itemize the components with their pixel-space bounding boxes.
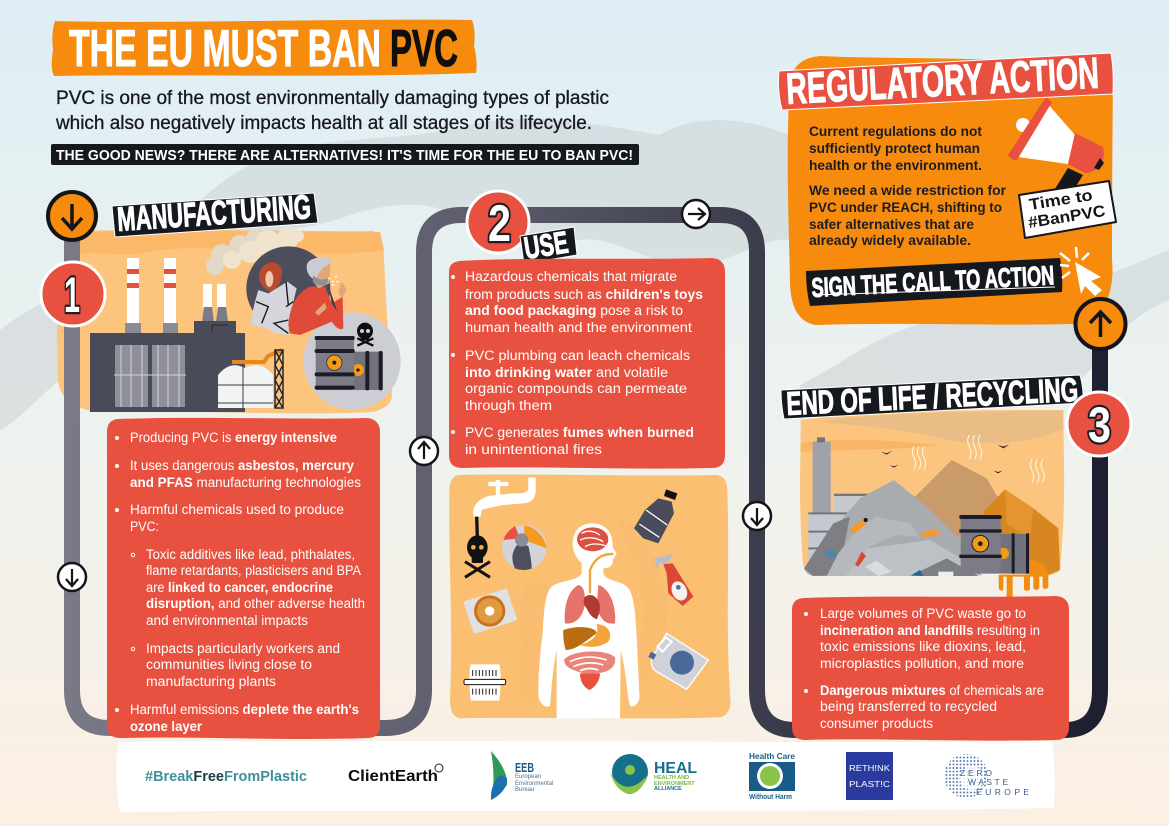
tube over illustration (64, 240, 80, 420)
intro text (55, 88, 609, 134)
title banner: PVC (390, 20, 458, 78)
logo: break free from plastic: #BreakFreeFromPlastic (145, 769, 307, 785)
logo: zero waste europe: W A S T E (968, 777, 1008, 787)
button: sign the call to action (806, 258, 1062, 306)
bullet list: manufacturing: and environmental impacts (146, 613, 308, 628)
bullet list: end of life: Large volumes of PVC waste go to (820, 606, 1026, 621)
bullet list: use (451, 269, 703, 457)
panel: end of life text (792, 596, 1069, 741)
bullet list: manufacturing: ozone layer (130, 719, 203, 734)
regulatory text: safer alternatives that are (809, 217, 974, 232)
logo: rethink plastic (846, 752, 893, 800)
panel: use text (449, 258, 725, 469)
logo: HEAL: ALLIANCE (654, 786, 682, 792)
bullet list: use: PVC generates fumes when burned (465, 425, 694, 440)
icon: food container (464, 664, 506, 701)
bullet list: manufacturing: Producing PVC is energy intensive (130, 430, 337, 445)
icon: smoke clouds (206, 227, 304, 275)
intro text: PVC is one of the most environmentally damaging types of plastic (56, 88, 609, 109)
title banner: THE EU MUST BAN (69, 20, 381, 78)
intro text: which also negatively impacts health at all stages of its lifecycle. (55, 113, 592, 134)
bullet list: manufacturing: and PFAS manufacturing technologies (130, 475, 361, 490)
icon: detergent container (648, 633, 708, 689)
logo: rethink plastic: RETH!NK (849, 764, 891, 773)
arrow: tube up middle (410, 437, 438, 465)
logo: zero waste europe (944, 754, 1029, 798)
footer logos strip (116, 741, 1055, 812)
regulatory text: sufficiently protect human (809, 141, 980, 156)
logo: rethink plastic: PLAST!C (849, 780, 890, 789)
bullet list: manufacturing: Impacts particularly workers and (146, 641, 340, 656)
icon: human body with organs (538, 523, 640, 718)
bullet list: use: organic compounds can permeate (465, 381, 687, 396)
number badge 3 (1067, 392, 1131, 456)
smoke background (0, 119, 1169, 430)
panel: use illustration (449, 475, 731, 718)
logo: clientearth: ClientEarth (348, 768, 438, 785)
bullet list: use: PVC plumbing can leach chemicals (465, 348, 690, 363)
bullet list: manufacturing: manufacturing plants (146, 674, 276, 689)
regulatory text: We need a wide restriction for (809, 183, 1007, 198)
bullet list: use: from products such as children's toys (465, 287, 703, 302)
logo: EEB: Environmental (515, 781, 553, 787)
sign: time to ban pvc (1019, 181, 1116, 238)
panel: manufacturing text (107, 418, 380, 739)
bullet list: use: through them (465, 398, 552, 413)
logo: EEB: European (515, 774, 541, 780)
button: sign the call to action: SIGN THE CALL TO ACTION (811, 260, 1055, 303)
icon: skull and crossbones (465, 535, 490, 577)
icon: waste mountains (804, 460, 1060, 577)
arrow: tube right top (682, 200, 710, 228)
bullet list: manufacturing: PVC: (130, 519, 159, 534)
logo: zero waste europe: Z E R O (960, 768, 992, 778)
logo: health care without harm: Without Harm (749, 792, 792, 801)
bullet list: manufacturing: Harmful chemicals used to produce (130, 502, 344, 517)
arrow: start circle (48, 192, 96, 240)
bullet list: use: and food packaging pose a risk to (465, 303, 683, 318)
logo: EEB: EEB (515, 760, 534, 775)
logo: health care without harm: Health Care (749, 752, 796, 761)
regulatory text (809, 124, 1007, 248)
bullet list: end of life: Dangerous mixtures of chemicals are (820, 683, 1044, 698)
heading: manufacturing: MANUFACTURING (116, 188, 312, 239)
panel: end of life illustration (800, 410, 1064, 600)
logo: HEAL: HEAL (654, 760, 697, 777)
icon: people coughing (246, 246, 347, 335)
sign: time to ban pvc: #BanPVC (1027, 203, 1107, 232)
bullet list: manufacturing: Toxic additives like lead, phthalates, (146, 547, 355, 562)
bullet list: manufacturing: It uses dangerous asbestos, mercury (130, 458, 354, 473)
icon: tap (473, 477, 536, 537)
number badge 2: 2 (488, 195, 511, 253)
regulatory text: PVC under REACH, shifting to (809, 200, 1002, 215)
icon: spray bottle (654, 553, 693, 606)
bullet list: end of life: consumer products (820, 716, 933, 731)
icon: incinerator (808, 437, 877, 559)
number badge 1: 1 (64, 267, 80, 323)
bullet list: use: Hazardous chemicals that migrate (465, 269, 677, 284)
logo: EEB: Bureau (515, 787, 534, 793)
logo: HEAL: HEALTH AND (654, 775, 689, 781)
arrow: end circle (1076, 299, 1126, 349)
logo: EEB (491, 751, 553, 800)
bullet list: manufacturing (115, 430, 365, 734)
regulatory text: health or the environment. (809, 158, 982, 173)
bullet list: end of life: microplastics pollution, and more (820, 656, 1024, 671)
icon: megaphone (1008, 97, 1104, 199)
logo: HEAL: ENVIRONMENT (654, 781, 695, 787)
bullet list: use: human health and the environment (465, 320, 692, 335)
arrow: tube down right (743, 502, 771, 530)
logo: zero waste europe: E U R O P E (976, 787, 1029, 797)
logo: HEAL (610, 754, 697, 794)
icon: food packaging (463, 588, 517, 634)
icon: click cursor (1060, 247, 1102, 296)
sign: time to ban pvc: Time to (1028, 187, 1094, 214)
good news bar: THE GOOD NEWS? THERE ARE ALTERNATIVES! IT'S TIME FOR THE EU TO BAN PVC! (56, 148, 633, 164)
heading: manufacturing (112, 188, 318, 239)
bullet list: end of life: toxic emissions like dioxins, lead, (820, 639, 1026, 654)
arrow: tube down left (58, 563, 86, 591)
bullet list: manufacturing: flame retardants, plasticisers and BPA (146, 563, 361, 578)
bullet list: use: into drinking water and volatile (465, 365, 668, 380)
regulatory text: Current regulations do not (809, 124, 983, 139)
number badge 1 (41, 262, 105, 326)
panel: regulatory action (788, 56, 1116, 325)
bullet list: manufacturing: Harmful emissions deplete the earth's (130, 702, 359, 717)
bullet list: manufacturing: communities living close to (146, 657, 312, 672)
bullet list: manufacturing: are linked to cancer, endocrine (146, 580, 333, 595)
icon: beach ball (502, 525, 547, 570)
icon: factory (90, 258, 283, 412)
heading: use: USE (522, 224, 571, 266)
icon: toxic barrels (303, 312, 401, 410)
icon: bottle (634, 489, 677, 543)
heading: end of life / recycling (781, 371, 1083, 422)
bullet list: end of life: incineration and landfills resulting in (820, 623, 1040, 638)
connecting path tube (72, 215, 1100, 730)
regulatory text: already widely available. (809, 233, 971, 248)
icon: leaking barrels (959, 515, 1048, 600)
number badge 2 (467, 191, 529, 253)
bullet list: end of life (804, 606, 1044, 731)
number badge 3: 3 (1088, 397, 1111, 453)
bullet list: use: in unintentional fires (465, 442, 602, 457)
panel: manufacturing illustration (57, 227, 401, 420)
bullet list: end of life: being transferred to recycled (820, 699, 997, 714)
bullet list: manufacturing: disruption, and other adverse health (146, 596, 365, 611)
icon: heat waves and birds (881, 435, 1044, 483)
logo: health care without harm (749, 752, 796, 801)
